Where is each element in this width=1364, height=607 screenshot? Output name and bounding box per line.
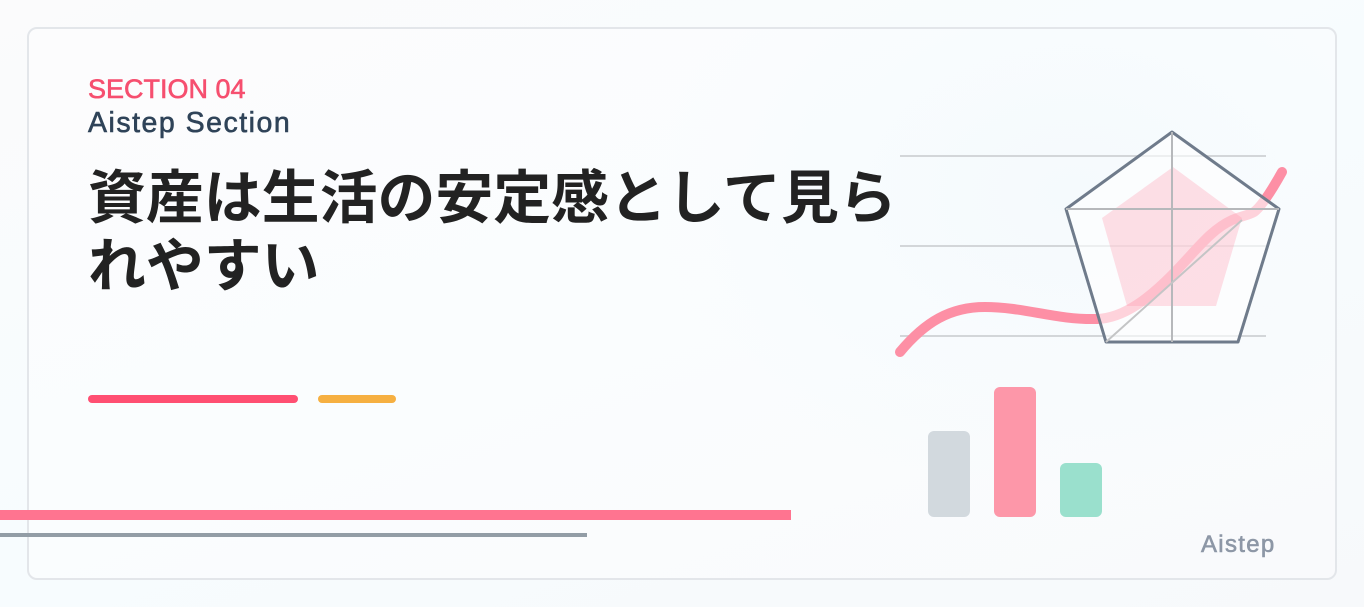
bar: pink [994,387,1036,517]
radar value area [1102,167,1242,306]
title [88,151,897,303]
title: れやすい [88,219,320,303]
accent bar: orange [318,395,396,403]
title: 資産は生活の安定感として見ら [88,151,897,235]
section subtitle: Aistep Section [88,107,291,139]
long pink rule [0,510,791,520]
accent bar: red [88,395,298,403]
bar chart [928,387,1102,517]
trend curve [900,172,1282,352]
radar axes [1066,132,1279,342]
section label: SECTION 04 [88,74,246,104]
bar: green [1060,463,1102,517]
brand label: Aistep [1201,531,1276,558]
grid lines [900,156,1266,336]
bar: gray [928,431,970,517]
radar outer pentagon [1066,132,1279,342]
long gray rule [0,533,587,537]
radar chart [1066,132,1279,342]
